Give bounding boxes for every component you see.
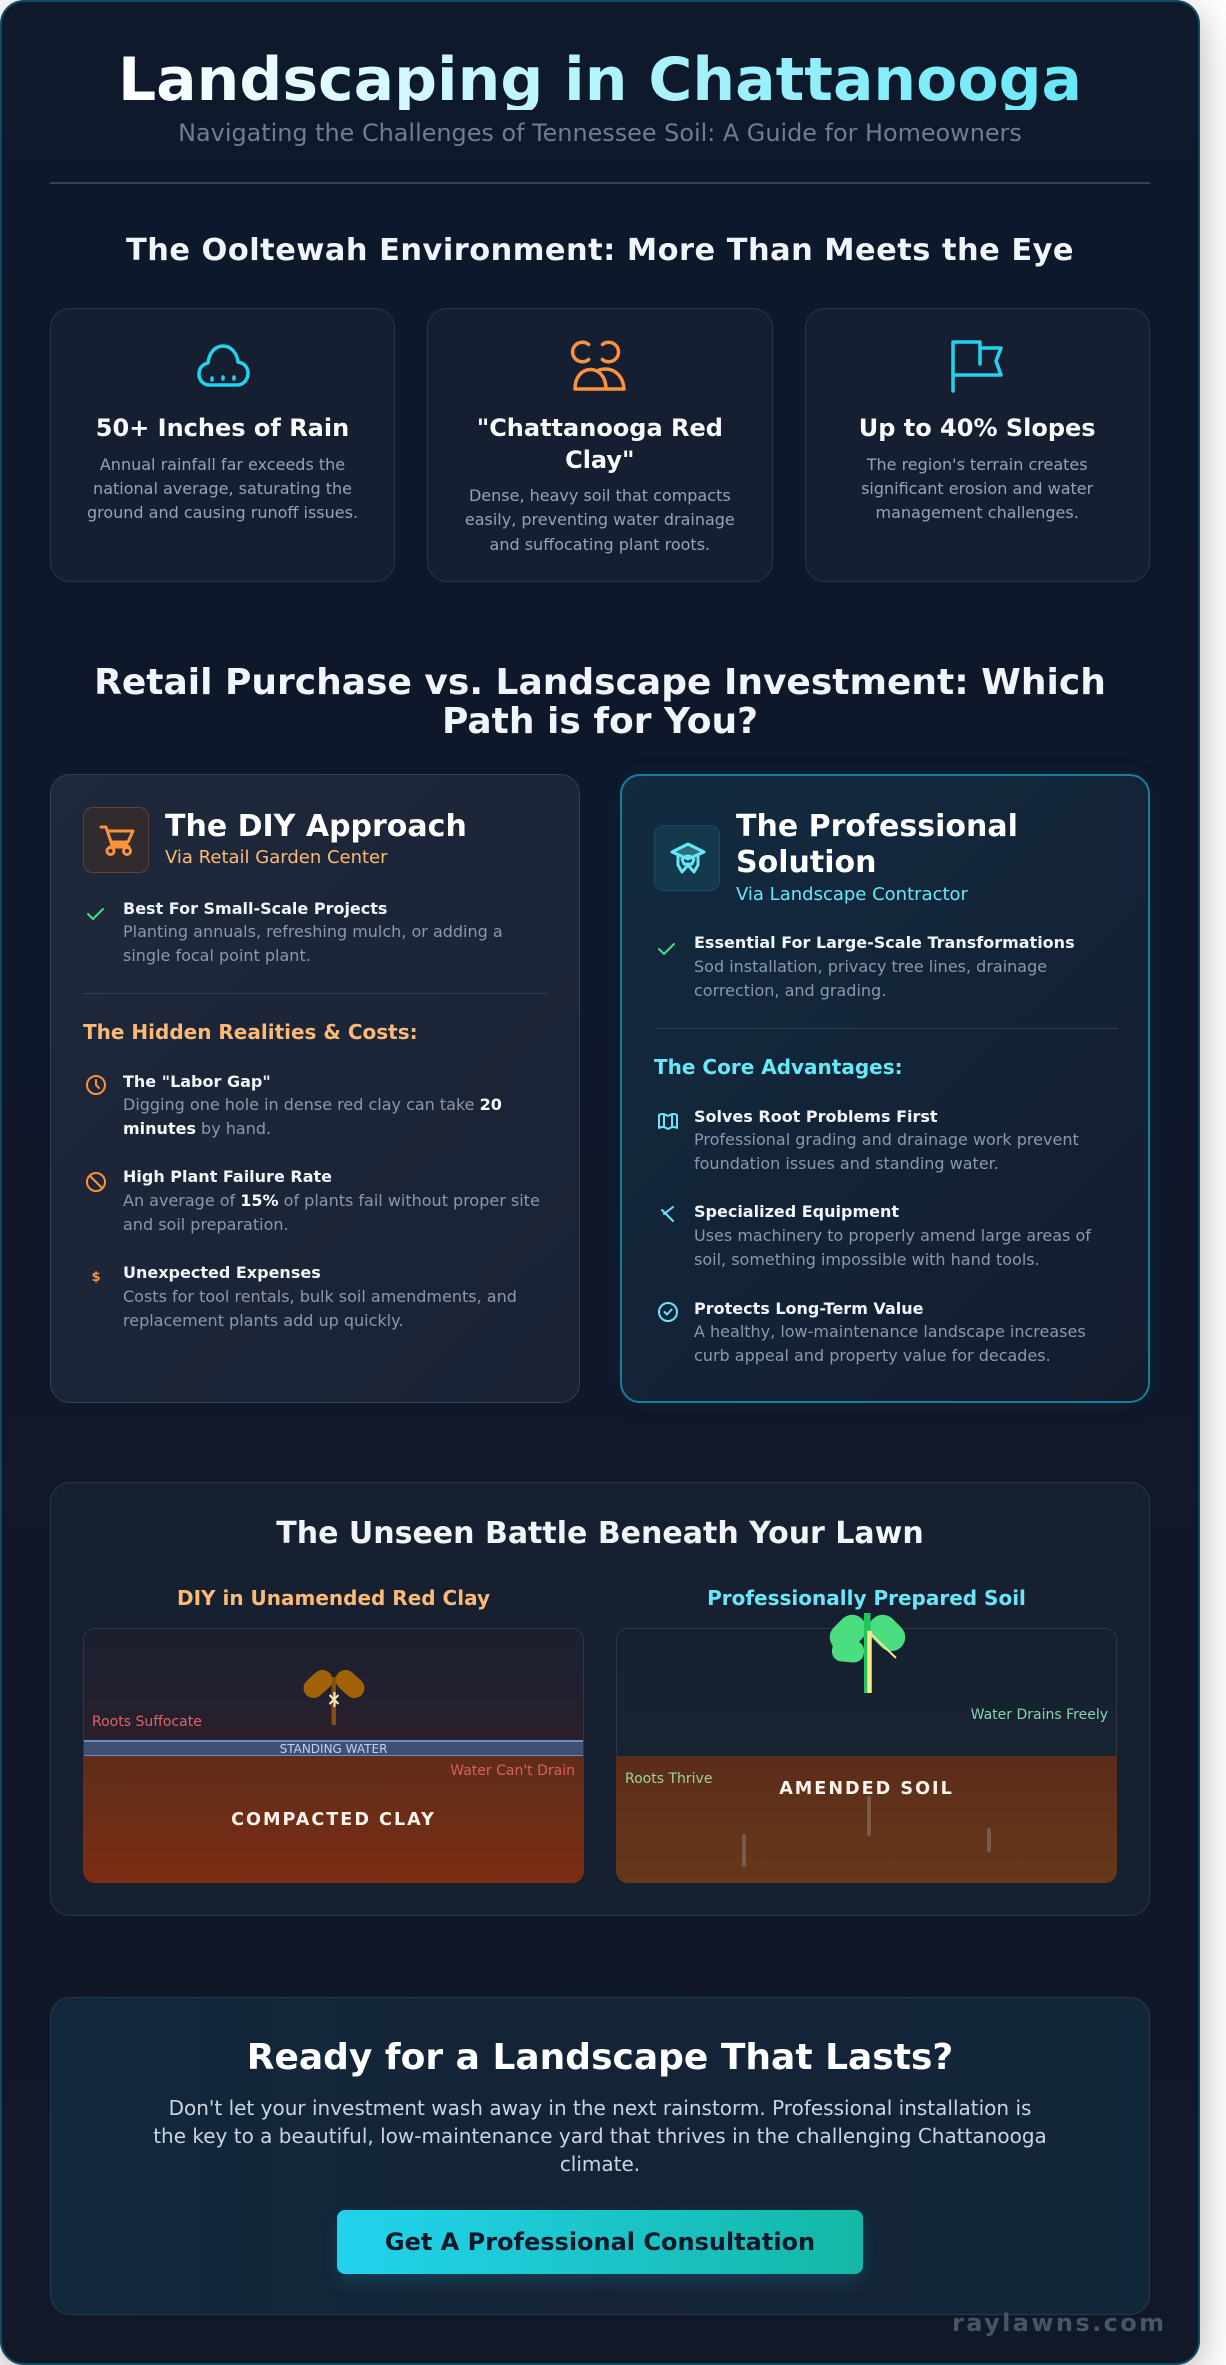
- icon: flag: [951, 340, 1003, 393]
- best-for item: [123, 898, 503, 965]
- panel: professional: foundation issues and standing water.: [694, 1154, 999, 1173]
- label: roots thrive: Roots Thrive: [625, 1771, 712, 1787]
- panel: DIY: minutes by hand.: [123, 1119, 271, 1138]
- header divider: [50, 182, 1150, 184]
- panel: professional: A healthy, low-maintenance landscape increases: [694, 1322, 1086, 1341]
- panel: DIY: and soil preparation.: [123, 1215, 289, 1234]
- standing water layer: [84, 1740, 583, 1757]
- card text: Dense, heavy soil that compacts: [469, 486, 731, 505]
- card text: The region's terrain creates: [867, 454, 1088, 474]
- cta text: Don't let your investment wash away in the next rainstorm. Professional installation is: [169, 2096, 1031, 2120]
- cta button: Get A Professional Consultation: [385, 2228, 815, 2256]
- heading: battle: The Unseen Battle Beneath Your Lawn: [276, 1516, 924, 1550]
- labor gap item: [123, 1072, 502, 1138]
- panel: DIY: single focal point plant.: [123, 946, 311, 965]
- icon: cart: [83, 807, 149, 873]
- label: amended soil: AMENDED SOIL: [779, 1778, 954, 1798]
- panel: DIY: The "Labor Gap": [123, 1072, 271, 1090]
- hidden costs heading: The Hidden Realities & Costs:: [83, 1020, 418, 1044]
- wilted plant: [304, 1670, 364, 1725]
- panel: DIY: [50, 774, 580, 1403]
- expenses item: [123, 1263, 517, 1330]
- clay soil layer: [83, 1756, 584, 1883]
- panel: professional: Specialized Equipment: [694, 1202, 899, 1221]
- scene: amended soil: [616, 1628, 1117, 1883]
- panel: DIY: An average of 15% of plants fail without proper site: [123, 1191, 540, 1210]
- healthy plant: [742, 1613, 991, 1867]
- card text: national average, saturating the: [93, 479, 352, 498]
- label: water drains: Water Drains Freely: [971, 1707, 1108, 1723]
- panel: DIY: replacement plants add up quickly.: [123, 1311, 403, 1330]
- heading: professional soil: Professionally Prepared Soil: [707, 1586, 1026, 1610]
- card text: easily, preventing water drainage: [465, 510, 735, 529]
- card title: [477, 414, 723, 474]
- card text: and suffocating plant roots.: [490, 535, 710, 554]
- card text: ground and causing runoff issues.: [87, 503, 358, 522]
- cta text: the key to a beautiful, low-maintenance yard that thrives in the challenging Chattanooga: [153, 2124, 1047, 2148]
- cta text: climate.: [560, 2152, 640, 2176]
- card title: Clay": [565, 446, 635, 474]
- card text: [861, 454, 1094, 522]
- DIY heading: The DIY Approach: [165, 808, 467, 844]
- panel: professional: Protects Long-Term Value: [694, 1298, 923, 1318]
- subtitle: Navigating the Challenges of Tennessee Soil: A Guide for Homeowners: [178, 119, 1022, 147]
- panel: DIY: High Plant Failure Rate: [123, 1167, 332, 1186]
- cta text: [153, 2096, 1047, 2176]
- panel: professional: Sod installation, privacy tree lines, drainage: [694, 957, 1047, 976]
- panel: rain card: [50, 308, 395, 582]
- scene: compacted clay: [83, 1628, 584, 1883]
- root problems item: [694, 1106, 1079, 1173]
- panel: soil comparison: [50, 1482, 1150, 1916]
- icon: rain cloud: [197, 344, 250, 387]
- heading: comparison: Retail Purchase vs. Landscape Investment: Which: [94, 662, 1106, 702]
- panel: DIY: Best For Small-Scale Projects: [123, 898, 387, 918]
- heading: environment: The Ooltewah Environment: More Than Meets the Eye: [126, 232, 1074, 268]
- card title: Up to 40% Slopes: [859, 414, 1096, 442]
- panel: professional: correction, and grading.: [694, 981, 886, 1000]
- panel: professional: Uses machinery to properly amend large areas of: [694, 1226, 1091, 1245]
- icon: clay people: [570, 340, 626, 391]
- professional heading: [736, 809, 1018, 880]
- card text: [465, 486, 735, 554]
- panel: professional: curb appeal and property value for decades.: [694, 1346, 1051, 1365]
- icon: check circle: [658, 1302, 678, 1322]
- equipment item: [694, 1202, 1092, 1269]
- failure rate item: [123, 1167, 540, 1234]
- advantages heading: The Core Advantages:: [654, 1055, 903, 1079]
- icon: graduation cap: [654, 825, 720, 891]
- icon: dollar: $: [91, 1270, 101, 1285]
- essential item: [694, 933, 1075, 1000]
- panel: DIY: Unexpected Expenses: [123, 1263, 321, 1282]
- panel: professional: soil, something impossible with hand tools.: [694, 1250, 1040, 1269]
- professional subheading: Via Landscape Contractor: [736, 884, 968, 904]
- amended soil layer: [616, 1756, 1117, 1883]
- icon: prohibited: [86, 1172, 106, 1192]
- panel: professional: Solves Root Problems First: [694, 1106, 938, 1126]
- cta heading: Ready for a Landscape That Lasts?: [247, 2037, 953, 2078]
- card title: "Chattanooga Red: [477, 414, 723, 442]
- panel: DIY: Digging one hole in dense red clay can take 20: [123, 1095, 502, 1114]
- icon: map: [658, 1113, 678, 1130]
- icon: check: [87, 908, 104, 920]
- icon: clock: [86, 1075, 106, 1095]
- DIY subheading: Via Retail Garden Center: [165, 847, 388, 868]
- card title: 50+ Inches of Rain: [96, 414, 349, 442]
- panel: professional: Essential For Large-Scale Transformations: [694, 933, 1075, 952]
- panel: clay card: [427, 308, 773, 582]
- panel: slopes card: [805, 308, 1150, 582]
- professional heading: The Professional: [736, 809, 1018, 844]
- icon: check: [658, 943, 675, 955]
- card text: significant erosion and water: [861, 479, 1093, 498]
- heading: comparison: [94, 662, 1106, 742]
- card text: Annual rainfall far exceeds the: [100, 454, 345, 474]
- standing water layer: STANDING WATER: [280, 1742, 387, 1756]
- panel: professional: [620, 774, 1150, 1403]
- card text: [87, 454, 358, 522]
- icon: tools: [661, 1206, 674, 1222]
- panel: DIY: Planting annuals, refreshing mulch, or adding a: [123, 922, 503, 941]
- label: roots suffocate: Roots Suffocate: [92, 1714, 202, 1730]
- title: Landscaping in Chattanooga: [118, 45, 1082, 115]
- value item: [694, 1298, 1086, 1365]
- cta button: [337, 2210, 863, 2274]
- professional heading: Solution: [736, 845, 876, 880]
- panel: DIY: Costs for tool rentals, bulk soil amendments, and: [123, 1287, 517, 1306]
- panel: call to action: [50, 1997, 1150, 2315]
- label: water cannot drain: Water Can't Drain: [450, 1763, 575, 1779]
- watermark: raylawns.com: [952, 2309, 1167, 2337]
- heading: DIY soil: DIY in Unamended Red Clay: [177, 1586, 490, 1610]
- label: compacted clay: COMPACTED CLAY: [231, 1810, 436, 1830]
- card text: management challenges.: [876, 503, 1079, 522]
- panel: professional: Professional grading and drainage work prevent: [694, 1130, 1079, 1149]
- heading: comparison: Path is for You?: [442, 701, 758, 742]
